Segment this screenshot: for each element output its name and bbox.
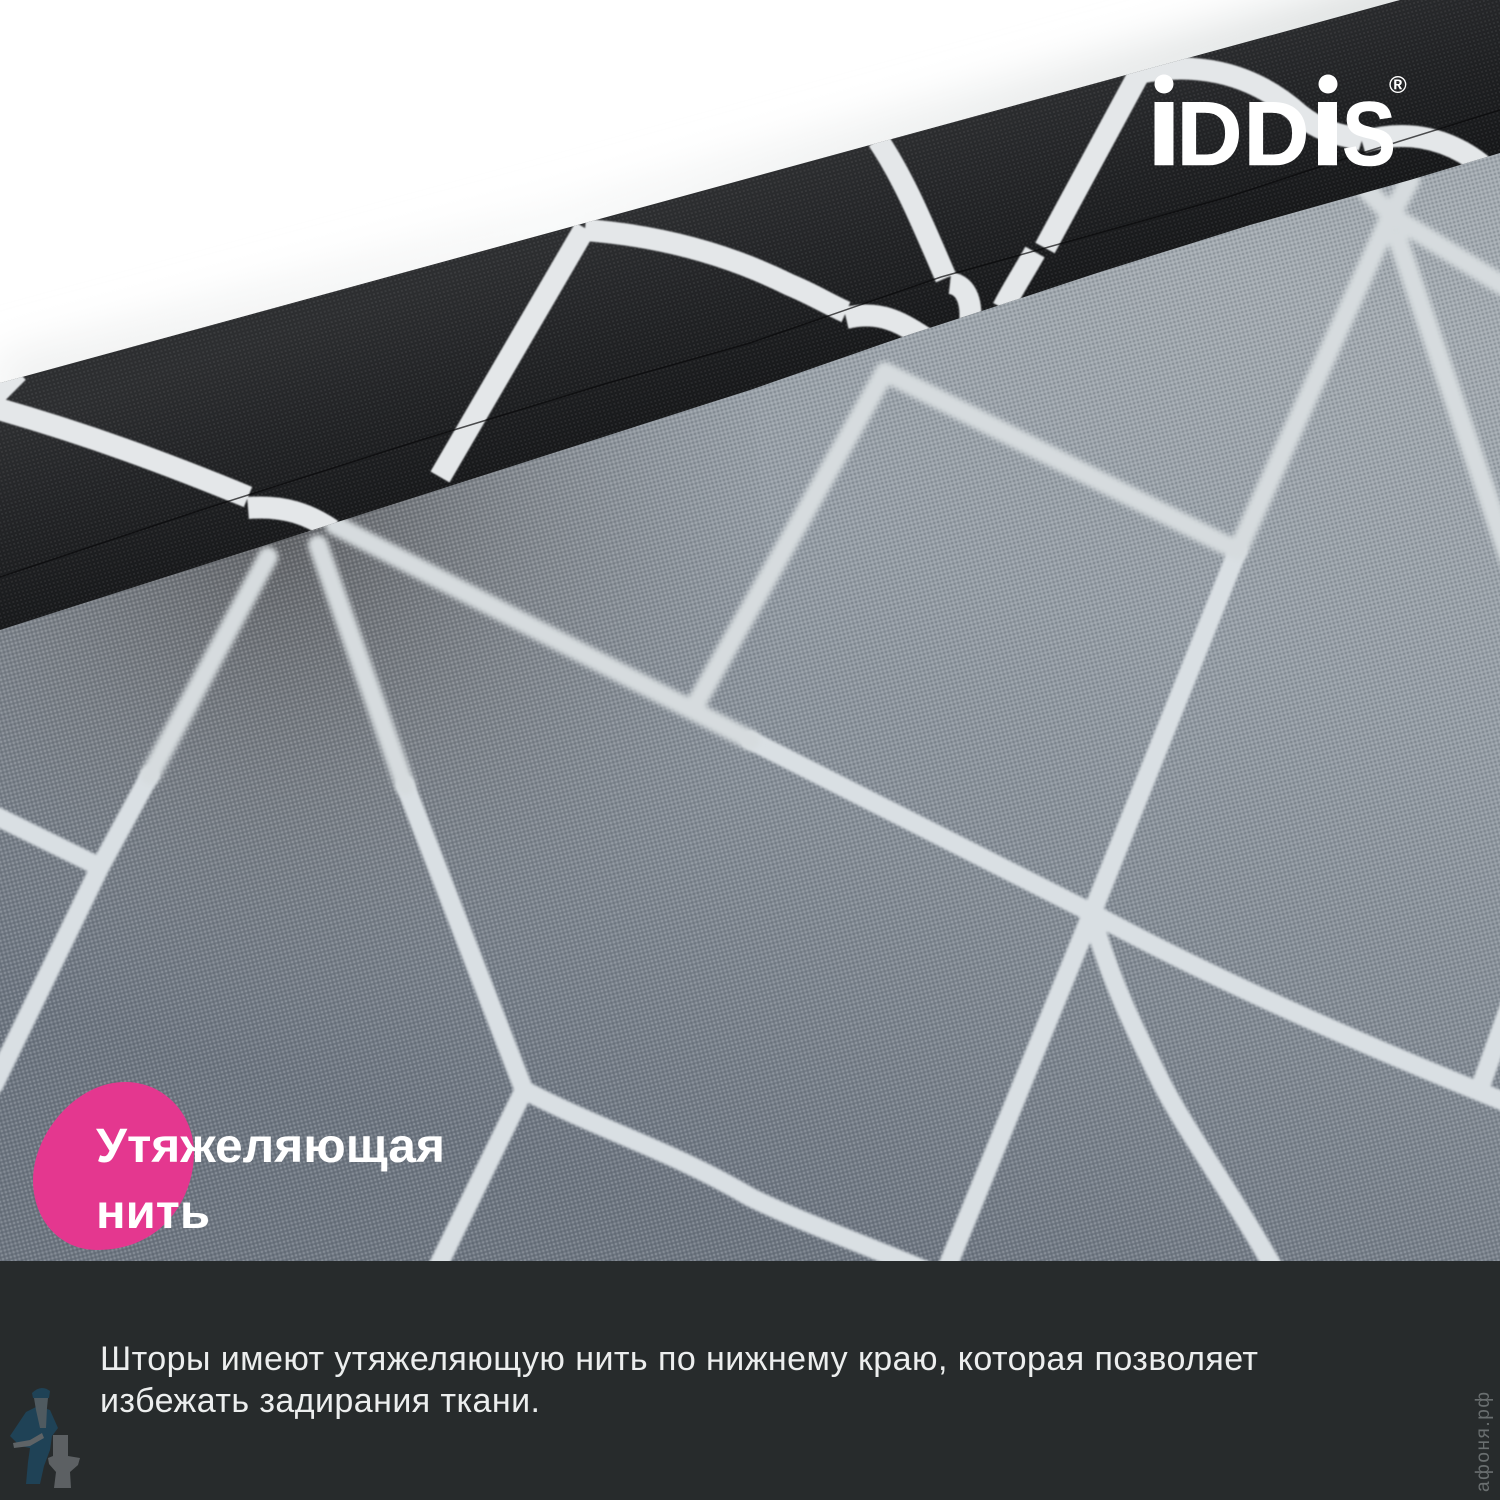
plumber figure — [10, 1388, 58, 1484]
logo letters: D — [1244, 84, 1310, 185]
toilet — [48, 1435, 80, 1488]
plumber face and shirt — [34, 1398, 48, 1428]
description text: избежать задирания ткани. — [100, 1382, 540, 1420]
wall shadow along curtain edge — [0, 0, 1420, 385]
hem white lines — [0, 68, 1482, 530]
footer panel — [0, 1261, 1500, 1500]
wrench — [13, 1433, 44, 1448]
fabric base — [0, 130, 1500, 1265]
white pattern lines, soft upper area — [150, 180, 1500, 785]
IDDIS logo — [1146, 72, 1407, 185]
description text: Шторы имеют утяжеляющую нить по нижнему краю, которая позволяет — [100, 1340, 1258, 1378]
fabric shading near hem — [0, 360, 800, 1100]
heading: нить — [96, 1186, 210, 1239]
logo letters: I — [1146, 84, 1182, 185]
photo: black curtain hem — [0, 0, 1500, 630]
icon: plumber with toilet watermark — [10, 1388, 80, 1488]
white pattern lines, sharp lower area — [0, 550, 1500, 1285]
pink blob accent — [33, 1082, 194, 1250]
registered mark: ® — [1389, 72, 1407, 99]
logo i dots — [1154, 74, 1338, 94]
hem fabric — [0, 0, 1500, 630]
logo letters: D — [1176, 84, 1242, 185]
description text — [100, 1340, 1258, 1420]
logo letters: I — [1310, 84, 1345, 185]
hem weave texture — [0, 0, 1500, 630]
hem stitching seam — [0, 110, 1500, 577]
photo: grey curtain fabric with white geometric lines — [0, 130, 1500, 1285]
heading: Утяжеляющая — [96, 1120, 445, 1173]
watermark text: афоня.рф — [1473, 1392, 1494, 1492]
heading — [96, 1120, 445, 1239]
fabric weave texture — [0, 130, 1500, 1265]
logo letters: S — [1342, 84, 1396, 185]
logo letters — [1146, 84, 1396, 185]
